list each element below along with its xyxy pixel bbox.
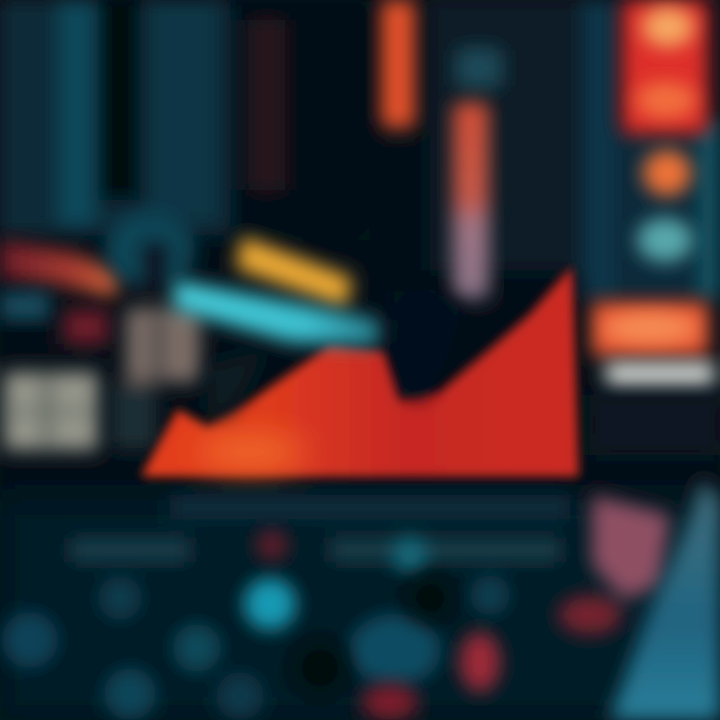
chart glow	[195, 434, 305, 470]
sign: red orange stripe	[0, 240, 120, 298]
tan figure	[105, 212, 200, 448]
top right red sign	[622, 0, 708, 134]
right orange and white sign	[590, 302, 720, 455]
street lights: bokeh circles	[2, 529, 510, 720]
teal diagonal stream	[610, 480, 720, 720]
teal lantern	[637, 218, 693, 262]
sign: teal bar	[0, 292, 50, 320]
cyan sign	[174, 280, 380, 346]
bottom ground: dark teal street	[0, 500, 720, 720]
sign: dark red block	[64, 310, 108, 344]
left side signs	[0, 240, 120, 450]
sign glow upper	[642, 7, 694, 47]
sign: pale block	[0, 372, 100, 450]
orange lantern	[643, 150, 691, 196]
yellow sign	[236, 236, 352, 308]
pink reflection	[558, 495, 670, 635]
sign glow lower	[636, 82, 696, 118]
vertical red and mauve sign	[453, 102, 489, 298]
orange vertical sign	[381, 0, 415, 128]
dark silhouette over chart	[208, 288, 462, 418]
buildings: dark teal towers	[0, 0, 720, 300]
red area chart	[142, 267, 578, 476]
